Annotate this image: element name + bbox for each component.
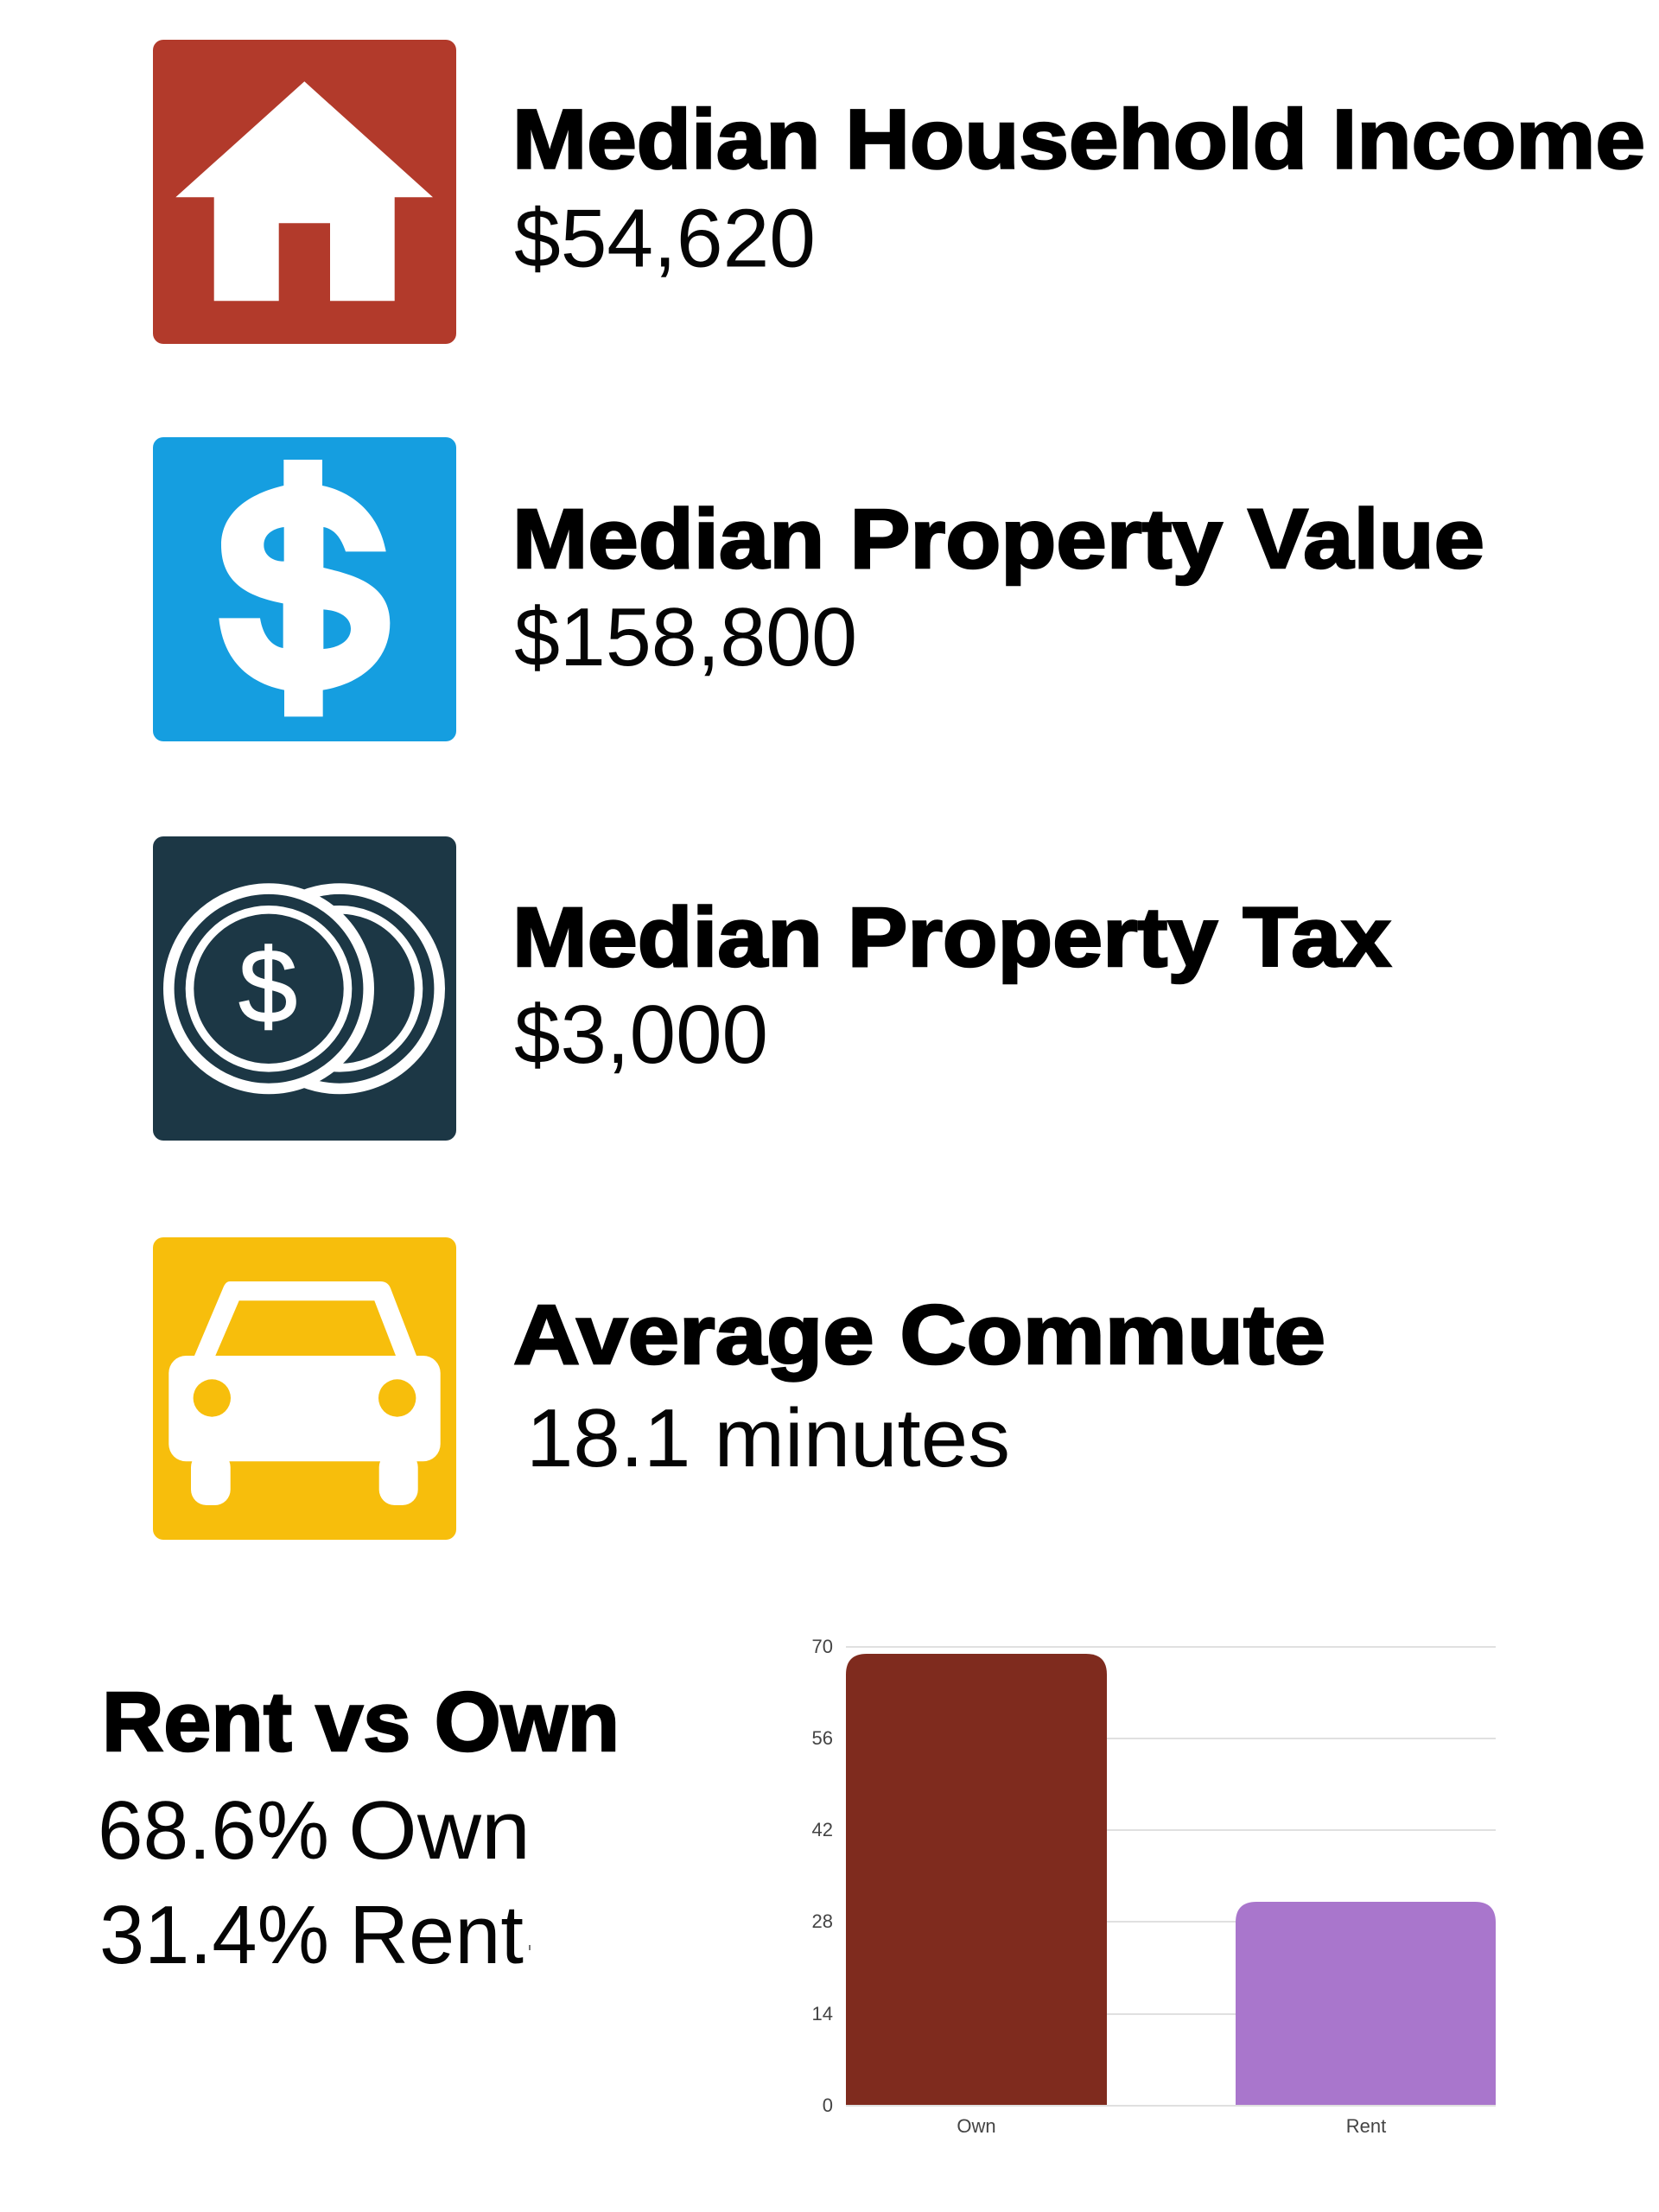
x axis labels: Own — [957, 2115, 996, 2137]
icon: dollar sign — [153, 437, 456, 741]
y axis labels: 28 — [812, 1910, 833, 1932]
x axis labels — [957, 2115, 1386, 2137]
value: commute time: 18.1 minutes — [526, 1392, 1010, 1484]
heading: average commute: Average Commute — [513, 1287, 1325, 1382]
y axis labels: 56 — [812, 1727, 833, 1749]
icon: coins: $ — [238, 927, 297, 1045]
y axis labels: 70 — [812, 1636, 833, 1657]
value: property tax: $3,000 — [514, 988, 768, 1081]
panel: median property tax — [153, 836, 1391, 1141]
bar chart: own vs rent — [812, 1636, 1496, 2137]
value: rent share: 31.4% — [99, 1889, 329, 1981]
icon: house — [153, 40, 456, 344]
icon: coins — [153, 836, 456, 1141]
heading: rent vs own: Rent vs Own — [102, 1675, 620, 1769]
bar: rent — [1236, 1902, 1496, 2105]
heading: median property value: Median Property Value — [512, 492, 1484, 586]
y axis labels: 42 — [812, 1819, 833, 1840]
icon: car — [153, 1237, 456, 1540]
panel: average commute — [153, 1237, 1325, 1540]
y axis labels: 0 — [823, 2094, 833, 2116]
value: rent share — [99, 1889, 531, 1981]
value: own share: 68.6% — [98, 1784, 329, 1877]
panel: median property value — [153, 437, 1484, 741]
x axis labels: Rent — [1346, 2115, 1386, 2137]
panel: rent vs own text — [98, 1675, 620, 1981]
panel: median household income — [153, 40, 1645, 344]
bar: own — [846, 1654, 1107, 2105]
y axis labels — [812, 1636, 833, 2116]
value: income: $54,620 — [514, 192, 816, 285]
value: rent share: Rent — [349, 1889, 524, 1981]
y axis labels: 14 — [812, 2003, 833, 2024]
heading: median property tax: Median Property Tax — [512, 890, 1391, 984]
value: own share — [98, 1784, 531, 1877]
value: own share: Own — [348, 1784, 531, 1877]
value: property value: $158,800 — [514, 591, 857, 683]
heading: median household income: Median Household Income — [512, 92, 1645, 187]
